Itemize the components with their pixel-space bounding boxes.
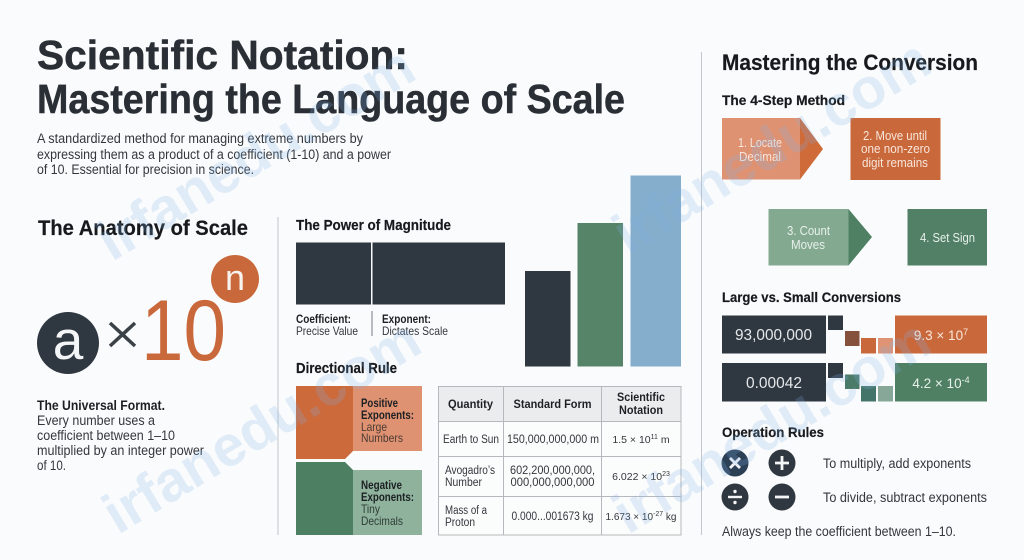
icon: minus [768, 484, 796, 510]
universal format text: Every number uses a [37, 413, 155, 428]
label: exponent: Exponent: [382, 312, 431, 326]
heading: directional rule: Directional Rule [296, 360, 397, 377]
table header [448, 390, 665, 417]
negative exponents block: Decimals [361, 514, 403, 528]
label: coefficient [296, 312, 358, 338]
formula: a times 10 to the n: n [225, 257, 245, 298]
row: earth to sun: 150,000,000,000 m [507, 434, 599, 446]
step 1 arrow: Decimal [739, 149, 781, 164]
icon: multiply [722, 450, 748, 476]
conversion row: large number [722, 316, 987, 354]
formula: a times 10 to the n: a [53, 309, 84, 371]
step 3 arrow: Moves [791, 237, 825, 252]
conversion row: large number: 93,000,000 [735, 327, 812, 344]
label: exponent: Dictates Scale [382, 324, 448, 338]
step 2 box: 2. Move until [863, 128, 927, 143]
intro text: A standardized method for managing extreme numbers by [37, 131, 363, 146]
universal format text: of 10. [37, 458, 66, 473]
positive exponents block: Positive [361, 396, 398, 410]
rule: divide: To divide, subtract exponents [823, 490, 987, 505]
positive exponents block [296, 386, 422, 459]
rule: multiply: To multiply, add exponents [823, 456, 971, 471]
step 4 box: 4. Set Sign [920, 230, 975, 245]
watermark: irfanedu.com [86, 34, 425, 273]
title: Scientific Notation: [37, 32, 408, 78]
row: earth to sun: 11 [651, 434, 658, 441]
heading: anatomy of scale: The Anatomy of Scale [38, 217, 248, 240]
row: mass of a proton: 0.000...001673 kg [512, 511, 594, 523]
panel: anatomy of scale [37, 217, 259, 473]
formula: a times 10 to the n [37, 255, 259, 379]
step 3 arrow: 3. Count [787, 223, 830, 238]
negative exponents block: Negative [361, 478, 402, 492]
label: coefficient: Coefficient: [296, 312, 351, 326]
table header: Quantity [448, 397, 493, 411]
table: number forms [438, 386, 681, 535]
row: avogadro's number: 000,000,000,000 [510, 477, 594, 489]
heading: power of magnitude: The Power of Magnitude [296, 217, 451, 234]
title: Mastering the Language of Scale [37, 76, 625, 122]
table header: Scientific [617, 390, 665, 404]
conversion row: large number: 7 [963, 327, 968, 337]
negative exponents block [296, 462, 422, 535]
heading: 4-step method: The 4-Step Method [722, 92, 845, 108]
conversion row: small number: 4.2 × 10 [912, 376, 962, 391]
row: mass of a proton: Proton [445, 517, 475, 529]
negative exponents block: Tiny [361, 502, 380, 516]
label: exponent [382, 312, 448, 338]
watermark: irfanedu.com [602, 27, 941, 266]
positive exponents block: Large [361, 420, 387, 434]
conversion row: small number: 0.00042 [746, 375, 802, 392]
step 2 box: one non-zero [861, 141, 930, 156]
rule: coefficient note: Always keep the coefficient between 1–10. [722, 524, 956, 539]
row: earth to sun: Earth to Sun [443, 434, 499, 446]
step 2 box: digit remains [862, 155, 928, 170]
conversion row: small number: -4 [962, 375, 970, 385]
row: avogadro's number: 23 [662, 471, 670, 478]
positive exponents block: Numbers [361, 431, 403, 445]
step 4 box [908, 209, 987, 266]
row: avogadro's number: Number [445, 477, 482, 489]
table header: Notation [619, 403, 663, 417]
row: earth to sun: 1.5 × 10 [612, 434, 651, 446]
watermark: irfanedu.com [92, 307, 431, 546]
row: avogadro's number: 602,200,000,000, [510, 465, 595, 477]
step 2 box [850, 118, 940, 180]
conversion row: small number [722, 363, 987, 402]
heading: large vs small conversions: Large vs. Small Conversions [722, 289, 901, 305]
heading: mastering the conversion: Mastering the Conversion [722, 50, 978, 75]
segmented bar [296, 242, 505, 304]
label: coefficient: Precise Value [296, 324, 358, 338]
row: earth to sun: m [658, 434, 670, 446]
universal format text: The Universal Format. [37, 398, 165, 413]
positive exponents block: Exponents: [361, 408, 414, 422]
conversion row: large number: 9.3 × 10 [914, 328, 963, 343]
icon: divide [722, 484, 748, 510]
row: mass of a proton: Mass of a [445, 505, 488, 517]
row: mass of a proton: -27 [653, 511, 663, 518]
row: avogadro's number [445, 465, 670, 489]
panel: 4-step method [722, 92, 987, 266]
bar chart: rising bars [525, 176, 681, 366]
step 3 arrow [768, 209, 872, 266]
intro text: of 10. Essential for precision in science. [37, 162, 254, 177]
panel: directional rule [296, 360, 422, 535]
formula: a times 10 to the n: 10 [141, 283, 226, 379]
watermark [86, 27, 941, 546]
intro text [37, 131, 391, 177]
panel: operation rules [722, 424, 987, 539]
table header: Standard Form [514, 397, 592, 411]
heading: operation rules: Operation Rules [722, 424, 824, 440]
step 1 arrow [722, 118, 823, 180]
panel: power of magnitude [296, 176, 681, 366]
row: avogadro's number: Avogadro’s [445, 465, 495, 477]
watermark: irfanedu.com [602, 307, 941, 546]
row: mass of a proton: kg [663, 512, 677, 523]
row: mass of a proton: 1.673 × 10 [605, 512, 653, 523]
universal format text: multiplied by an integer power [37, 443, 204, 458]
panel: large vs small conversions [722, 289, 987, 402]
intro text: expressing them as a product of a coefficient (1-10) and a power [37, 147, 391, 162]
universal format text [37, 398, 204, 473]
icon: plus [768, 450, 796, 476]
row: mass of a proton [445, 505, 677, 529]
negative exponents block: Exponents: [361, 490, 414, 504]
title [37, 32, 625, 122]
row: avogadro's number: 6.022 × 10 [612, 471, 662, 483]
row: earth to sun [443, 434, 670, 446]
universal format text: coefficient between 1–10 [37, 428, 175, 443]
step 1 arrow: 1. Locate [738, 135, 782, 150]
